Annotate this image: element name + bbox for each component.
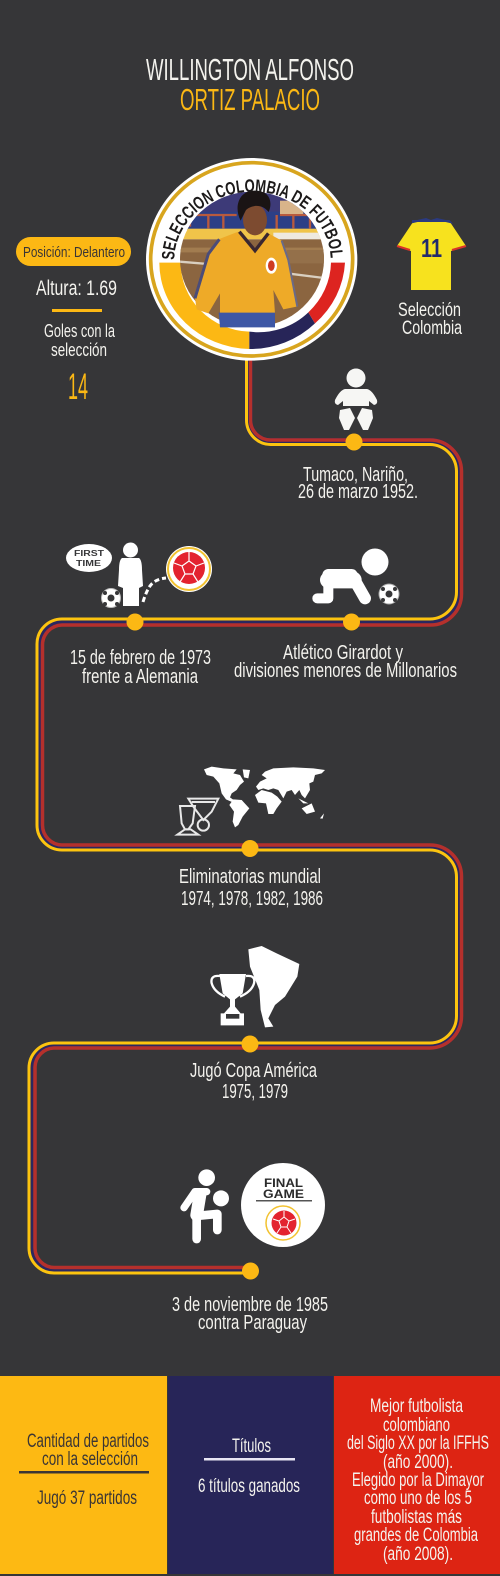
event: last match [172, 1262, 328, 1334]
event: Copa America: Jugó Copa América [190, 1060, 318, 1082]
panel: honours: futbolistas más [371, 1507, 462, 1528]
panel: honours: colombiano [383, 1415, 450, 1436]
icon: trophy and south america [211, 946, 299, 1027]
event: Copa America: 1975, 1979 [222, 1081, 288, 1103]
event: birth: 26 de marzo 1952. [298, 481, 418, 503]
panel: honours: (año 2000). [383, 1452, 453, 1473]
event: youth clubs [234, 614, 457, 682]
event: last match: contra Paraguay [198, 1312, 307, 1334]
event: debut: 15 de febrero de 1973 [70, 647, 211, 669]
event: world cup qualifiers: 1974, 1978, 1982, 1986 [181, 888, 323, 910]
panel: titles: Títulos [232, 1436, 271, 1457]
event: last match: 3 de noviembre de 1985 [172, 1294, 328, 1316]
event: world cup qualifiers: Eliminatorias mundial [179, 866, 321, 888]
title [146, 52, 354, 117]
icon: final game badge [241, 1163, 325, 1247]
icon: player kicking ball [184, 1169, 229, 1239]
panel: matches: Cantidad de partidos [27, 1431, 149, 1452]
event: Copa America [190, 1036, 318, 1103]
title: ORTIZ PALACIO [180, 82, 320, 117]
panel: honours: Mejor futbolista [370, 1396, 463, 1417]
icon: final game badge: FINAL [264, 1176, 303, 1190]
position pill: Posición: Delantero [23, 244, 125, 261]
event: youth clubs: Atlético Girardot y [283, 642, 403, 664]
jersey label [398, 300, 462, 339]
panel: honours: (año 2008). [383, 1544, 453, 1565]
panel: honours [334, 1376, 500, 1574]
jersey label: Selección [398, 300, 461, 321]
panel: matches: con la selección [42, 1449, 138, 1470]
icon: first time debut [66, 542, 212, 608]
goals label [44, 321, 116, 360]
event: birth: Tumaco, Nariño, [303, 464, 408, 486]
goals label: selección [51, 340, 107, 360]
event: debut [70, 614, 211, 688]
badge lettering: SELECCION COLOMBIA DE FUTBOL [162, 179, 343, 260]
icon: jersey: 11 [421, 233, 442, 263]
icon: final game badge: GAME [263, 1187, 304, 1201]
height divider [52, 309, 102, 312]
event: world cup qualifiers [179, 840, 323, 910]
event: debut: frente a Alemania [82, 666, 199, 688]
panel: matches [0, 1376, 167, 1574]
goals label: Goles con la [44, 321, 116, 341]
height: Altura: 1.69 [36, 277, 117, 300]
title: WILLINGTON ALFONSO [146, 52, 354, 87]
position pill [16, 237, 131, 266]
panel: titles: 6 títulos ganados [198, 1476, 300, 1497]
panel: titles [168, 1376, 333, 1574]
icon: baby [335, 368, 377, 430]
player badge [146, 158, 358, 361]
icon: first time debut: FIRST [74, 549, 104, 558]
icon: jersey [397, 219, 466, 290]
event: birth [298, 434, 418, 503]
jersey label: Colombia [402, 318, 462, 339]
icon: world map and medal [177, 767, 325, 835]
text: 14 [68, 366, 88, 407]
panel: matches: Jugó 37 partidos [37, 1488, 137, 1509]
icon: crawling baby [317, 548, 399, 604]
icon: first time debut: TIME [76, 559, 102, 568]
timeline path [29, 360, 462, 1273]
